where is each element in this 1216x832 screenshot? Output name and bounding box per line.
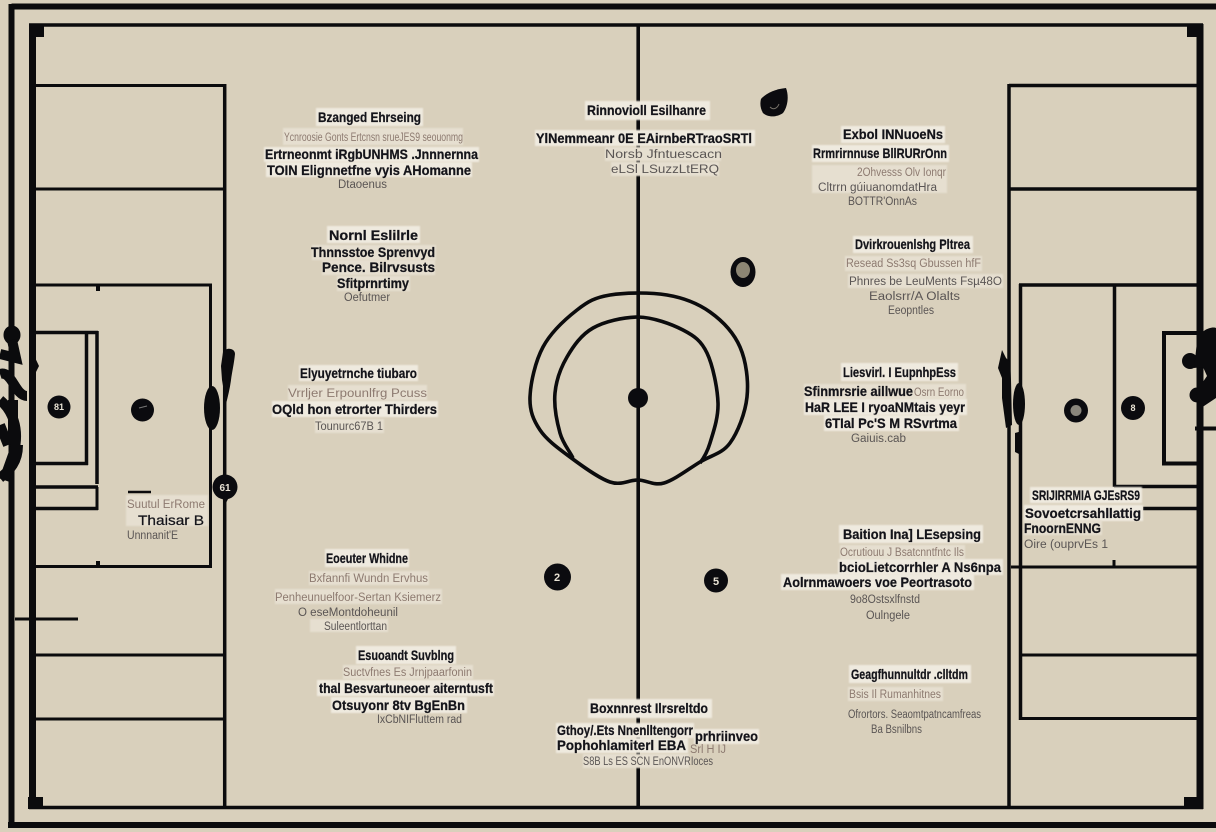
heading: Eoeuter Whidne: [326, 550, 408, 566]
body: [317, 665, 494, 726]
body: BOTTR'OnnAs: [848, 196, 917, 208]
heading: Exbol INNuoeNs: [843, 126, 943, 142]
text block: right 2: [845, 236, 1003, 317]
left goal post ornament: [204, 349, 235, 430]
body: IxCbNIFluttem rad: [377, 714, 462, 726]
text block: right penalty note: Oire (ouprvEs 1: [1024, 539, 1108, 551]
body: Cltrrn gúiuanomdatHra: [818, 182, 938, 194]
marker 4: [544, 564, 571, 590]
marker 6: [1064, 398, 1088, 422]
body: [311, 244, 436, 304]
center line: [636, 25, 640, 808]
body: YlNemmeanr 0E EAirnbeRTraoSRTl: [536, 130, 752, 146]
body: [812, 145, 949, 208]
marker 7: [1121, 396, 1145, 420]
right side zone: [1009, 84, 1198, 808]
heading: Rinnovioll Esilhanre: [587, 102, 706, 118]
body: Pophohlamiterl EBA: [557, 737, 686, 753]
text block: right penalty note: [1024, 487, 1143, 551]
heading: Nornl Eslilrle: [329, 227, 418, 243]
heading: Esuoandt Suvblng: [358, 647, 454, 663]
body: Eeopntles: [888, 305, 934, 317]
body: Srl H IJ: [690, 744, 726, 756]
body: Ycnroosie Gonts Ertcnsn srueJES9 seouonmg: [284, 132, 463, 144]
body: Suleentlorttan: [324, 621, 387, 633]
heading: Dvirkrouenlshg Pltrea: [855, 236, 970, 252]
body: O eseMontdoheunil: [298, 607, 398, 619]
body: Suctvfnes Es Jrnjpaarfonin: [343, 667, 472, 679]
body: [272, 385, 438, 433]
body: bcioLietcorrhler A Ns6npa: [839, 559, 1001, 575]
marker 3: [212, 474, 238, 503]
marker 5: 5: [713, 576, 719, 588]
marker 5: [704, 568, 728, 592]
body: 6TIal Pc'S M RSvrtma: [825, 415, 957, 431]
text block: left 1: [264, 108, 479, 191]
text block: left penalty note: Thaisar B: [138, 512, 204, 528]
body: [264, 128, 479, 191]
text block: right 5: [848, 665, 981, 736]
body: Norsb Jfntuescacn: [605, 149, 722, 161]
heading: Liesvirl. I EupnhpEss: [843, 364, 956, 380]
body: Resead Ss3sq Gbussen hfF: [846, 258, 981, 270]
body: [845, 256, 1003, 317]
body: [535, 130, 755, 176]
left side zone: [15, 84, 226, 808]
text block: left penalty note: [126, 492, 208, 542]
body: Ofrortors. Seaomtpatncamfreas: [848, 709, 981, 721]
body: Sfitprnrtimy: [337, 275, 409, 291]
marker 3: 61: [219, 483, 231, 494]
text block: right 1: [812, 126, 949, 208]
text block: left 4: [275, 549, 442, 633]
body: 9o8Ostsxlfnstd: [850, 594, 920, 606]
body: [556, 722, 759, 768]
heading: Geagfhunnultdr .clltdm: [851, 666, 968, 682]
body: Bxfannfi Wundn Ervhus: [309, 573, 428, 585]
text block: right 3: [804, 363, 967, 445]
body: Eaolsrr/A Olalts: [869, 291, 960, 303]
heading: Boxnnrest Ilrsreltdo: [590, 700, 708, 716]
body: prhriinveo: [695, 728, 758, 744]
marker 1: 81: [54, 402, 64, 412]
text block: left penalty note: Suutul ErRome: [127, 499, 205, 511]
right wall figure: [1182, 328, 1216, 408]
body: Tounurc67B 1: [315, 421, 383, 433]
body: Thnnsstoe Sprenvyd: [311, 244, 435, 260]
marker 7: 8: [1130, 403, 1136, 413]
body: Otsuyonr 8tv BgEnBn: [332, 697, 465, 713]
body: 2Ohvesss Olv Ionqr: [857, 167, 946, 179]
body: TOIN Elignnetfne vyis AHomanne: [267, 162, 471, 178]
marker 1: [48, 396, 70, 418]
text block: left 2: [311, 226, 436, 304]
heading: Baition Ina] LEsepsing: [843, 526, 981, 542]
text block: left penalty note: Unnnanit'E: [127, 530, 178, 542]
text block: left 5: [317, 646, 494, 726]
body: Ba Bsnilbns: [871, 724, 922, 736]
body: S8B Ls ES SCN EnONVRIoces: [583, 756, 713, 768]
body: Gthoy/.Ets Nnenlltengorr: [557, 722, 693, 738]
marker 2: [131, 398, 154, 422]
marker 8: top shield: [760, 88, 788, 116]
body: Gaiuis.cab: [851, 433, 906, 445]
heading: Bzanged Ehrseing: [318, 109, 421, 125]
body: Penheunuelfoor-Sertan Ksiemerz: [275, 592, 441, 604]
body: Oulngele: [866, 610, 910, 622]
body: [804, 383, 967, 445]
marker 9: upper oval: [730, 257, 756, 287]
text block: right penalty note: Sovoetcrsahllattig: [1025, 505, 1141, 521]
text block: right penalty note: FnoornENNG: [1024, 520, 1101, 536]
text block: left 3: [272, 365, 438, 433]
body: Aolrnmawoers voe Peortrasoto: [783, 574, 972, 590]
body: Osrn Eorno: [914, 387, 964, 399]
body: [781, 545, 1003, 622]
body: eLSl LSuzzLtERQ: [611, 164, 719, 176]
body: HaR LEE I ryoaNMtais yeyr: [805, 399, 965, 415]
body: Ertrneonmt iRgbUNHMS .Jnnnernna: [265, 146, 478, 162]
text block: right 4: [781, 525, 1003, 622]
marker 4: 2: [554, 572, 560, 584]
body: thal Besvartuneoer aiterntusft: [319, 680, 493, 696]
body: Rrmrirnnuse BllRURrOnn: [813, 145, 947, 161]
body: Bsis Il Rumanhitnes: [849, 689, 941, 701]
body: Pence. Bilrvsusts: [322, 259, 435, 275]
body: Ocrutiouu J Bsatcnntfntc Ils: [840, 547, 964, 559]
right penalty box: [1019, 284, 1216, 720]
text block: center top: [535, 101, 755, 176]
body: OQld hon etrorter Thirders: [272, 401, 437, 417]
right goal post ornament: [998, 350, 1025, 455]
body: Dtaoenus: [338, 179, 387, 191]
body: [848, 687, 981, 736]
heading: Elyuyetrnche tiubaro: [300, 365, 417, 381]
left penalty box: [36, 284, 212, 568]
body: Sfinmrsrie aillwue: [804, 383, 913, 399]
center circles: [530, 293, 748, 484]
body: Oefutmer: [344, 292, 390, 304]
body: Phnres be LeuMents Fsµ48O: [849, 276, 1002, 288]
body: Vrrljer Erpounlfrg Pcuss: [288, 388, 427, 400]
body: [275, 571, 442, 633]
text block: center bottom: [556, 699, 759, 768]
left wall figure: [0, 326, 39, 480]
text block: right penalty note: SRIJIRRMIA GJEsRS9: [1032, 487, 1140, 503]
